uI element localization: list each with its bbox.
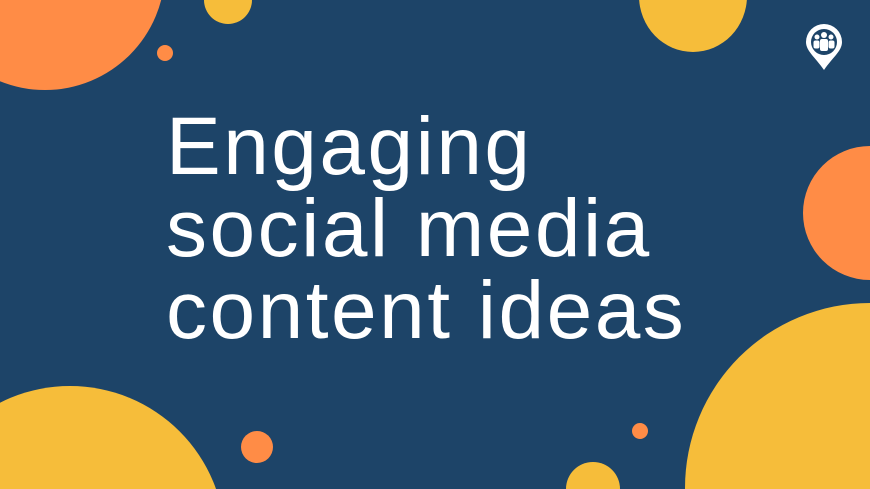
circle: small orange dot bottom right	[632, 423, 648, 439]
title: content ideas	[166, 265, 686, 356]
icon: logo pin	[806, 24, 842, 70]
circle: bottom-right yellow	[685, 303, 870, 489]
circle: top-right yellow	[639, 0, 747, 52]
circle: top-left orange	[0, 0, 165, 90]
circle: top small yellow	[204, 0, 252, 24]
circle: bottom yellow	[566, 462, 620, 489]
circle: orange dot bottom	[241, 431, 273, 463]
circle: bottom-left yellow	[0, 386, 225, 489]
circle: right orange	[803, 146, 870, 280]
circle: small orange dot	[157, 45, 173, 61]
title: social media	[166, 183, 652, 274]
title	[166, 101, 686, 356]
title: Engaging	[166, 101, 533, 192]
